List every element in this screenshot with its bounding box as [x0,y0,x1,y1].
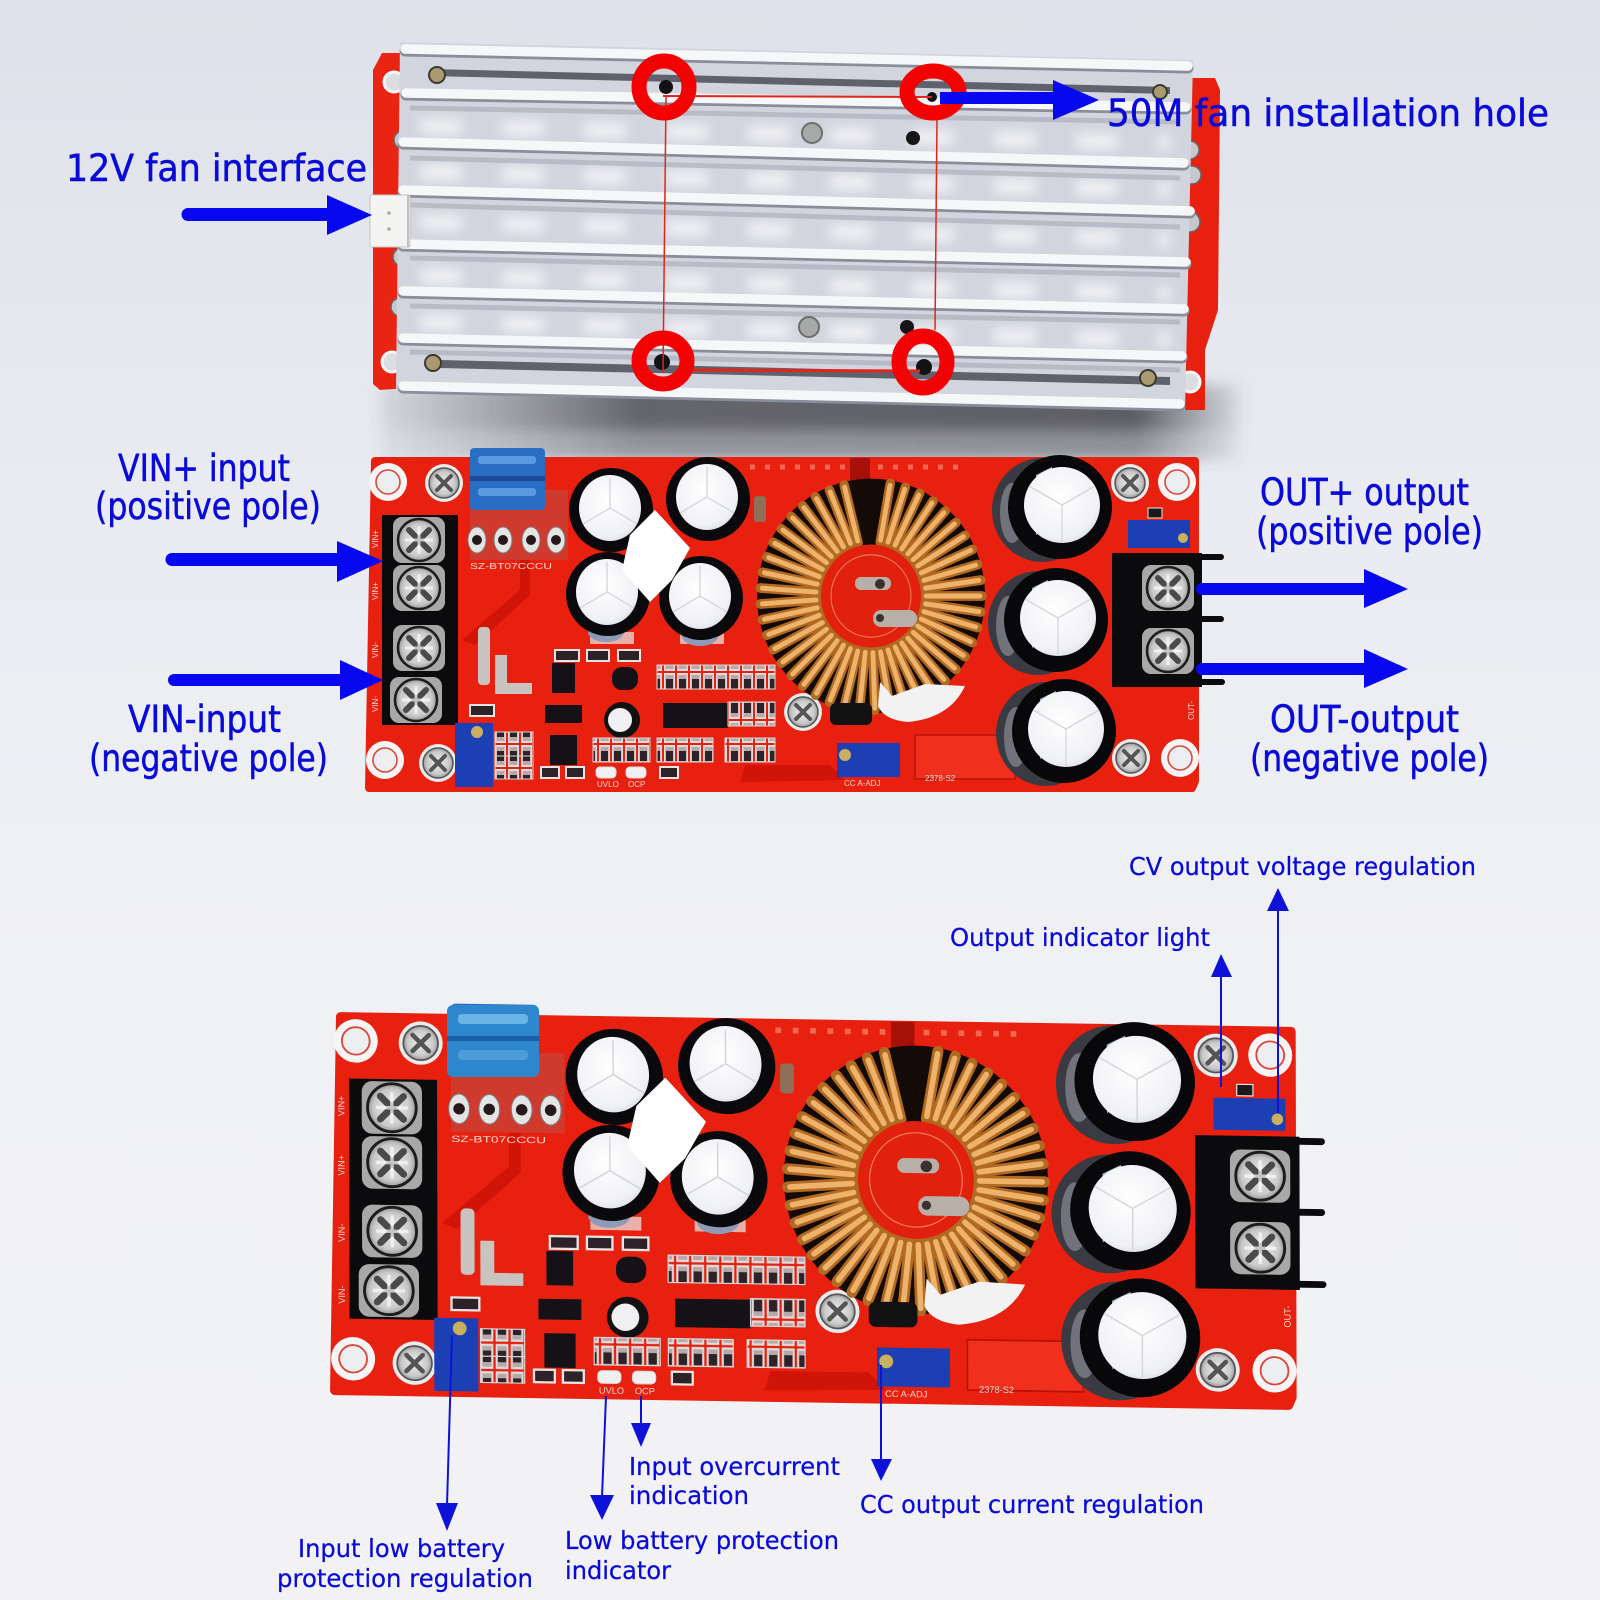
panel: board with adjustment labels [330,1002,1323,1407]
shadow beneath heat sink [380,385,1240,460]
silkscreen labels: UVLO [597,780,619,789]
label: CC regulation: CC output current regulation [860,1490,1204,1519]
label: VIN+ input: (positive pole) [95,485,321,528]
label: OUT- output [1250,698,1489,780]
label: OUT+ output: (positive pole) [1256,510,1483,553]
arrow: CC regulation [871,1365,892,1481]
heat sink fins [403,49,1190,406]
arrow: fan installation hole [940,80,1099,120]
label: output indicator: Output indicator light [950,923,1210,952]
PCB mount holes [382,72,1200,392]
fan hole spacing lines [663,96,937,373]
heat sink highlights [420,126,1170,340]
label: VIN- input [89,698,328,780]
label: VIN- input: VIN-input [128,698,281,741]
silkscreen labels: SZ-BT07CCCU [470,562,552,571]
CC potentiometer [837,743,900,777]
label: input overcurrent: indication [629,1481,749,1510]
arrow: OUT- output [1196,649,1408,688]
SMD resistor arrays [495,665,775,779]
label: input low battery regulation: Input low battery [298,1534,505,1563]
centre fixings [799,123,920,337]
label: VIN+ input [95,447,321,528]
mounting screws on heat sink [425,67,1167,386]
pad block under fuse [468,490,568,560]
circuit board [369,461,1195,788]
icon: lighter fuse on lower board [447,1005,539,1077]
label: input overcurrent [629,1452,840,1510]
silver jumper strips [478,627,532,694]
board screws [419,464,1150,782]
indicator LEDs [596,767,646,778]
silkscreen labels: VIN- [371,696,380,712]
silkscreen labels: VIN+ [371,530,380,548]
ICs [545,663,728,765]
label: VIN- input: (negative pole) [89,737,328,780]
arrow: VIN+ input [166,541,383,582]
label: input overcurrent: Input overcurrent [629,1452,840,1481]
label: OUT+ output [1256,471,1483,553]
panel: board top view with wiring [366,448,1222,789]
label: CV regulation: CV output voltage regulation [1129,852,1476,881]
silkscreen labels: VIN+ [371,582,380,600]
arrow: 12V fan interface [182,195,372,235]
heat sink body [396,42,1193,410]
toroid inductor [757,479,985,725]
panel: heat sink module [370,42,1220,410]
output indicator LED [1148,508,1162,518]
label: OUT- output: OUT-output [1270,698,1459,741]
white glue [622,510,690,602]
blue fuse [470,448,545,510]
small SMD pads [470,650,678,778]
silkscreen labels [371,530,1196,789]
corner mounting holes [366,463,1199,779]
label: input low battery regulation [277,1534,533,1593]
silkscreen labels: CC A-ADJ [844,779,880,788]
label: low battery indicator: Low battery protection [565,1526,839,1555]
CV potentiometer [1128,520,1190,548]
label: fan installation hole: 50M fan installation hole [1107,92,1549,135]
fan holes [654,80,937,375]
small electrolytic capacitor [604,702,640,738]
silkscreen labels: OCP [628,780,645,789]
via rows [750,464,960,470]
icon: fan connector [370,195,410,247]
label: fan interface: 12V fan interface [66,147,367,190]
label: low battery indicator: indicator [565,1556,672,1585]
heat sink channel shading [410,108,1180,370]
label: OUT+ output: OUT+ output [1260,471,1469,514]
left PCB edge [373,53,410,390]
small capacitor [754,496,766,522]
right PCB edge [1180,78,1220,410]
arrow: low battery indicator [590,1396,614,1520]
output capacitors [988,455,1116,786]
input capacitors [566,457,750,646]
label: VIN+ input: VIN+ input [118,447,290,490]
label: OUT- output: (negative pole) [1250,737,1489,780]
capacitor ends seen beside the heat sink [391,131,1201,316]
input low battery potentiometer [455,723,493,787]
heat sink grooves [430,69,1170,385]
label: low battery indicator [565,1526,839,1585]
label: input low battery regulation: protection regulation [277,1564,533,1593]
red hole markers [639,61,959,388]
arrow: input overcurrent indication [631,1396,651,1447]
arrow: output indicator [1211,954,1232,1087]
board traces [462,458,1015,782]
arrow: CV regulation [1267,888,1289,1113]
arrow: VIN- input [168,660,383,700]
input terminal block [382,515,458,725]
arrow: input low battery regulation [436,1335,458,1531]
output terminal block [1112,553,1222,687]
silkscreen labels: OUT- [1187,701,1196,720]
silkscreen labels: VIN- [371,642,380,658]
silkscreen labels: 2378-S2 [925,774,956,783]
arrow: OUT+ output [1196,569,1408,608]
